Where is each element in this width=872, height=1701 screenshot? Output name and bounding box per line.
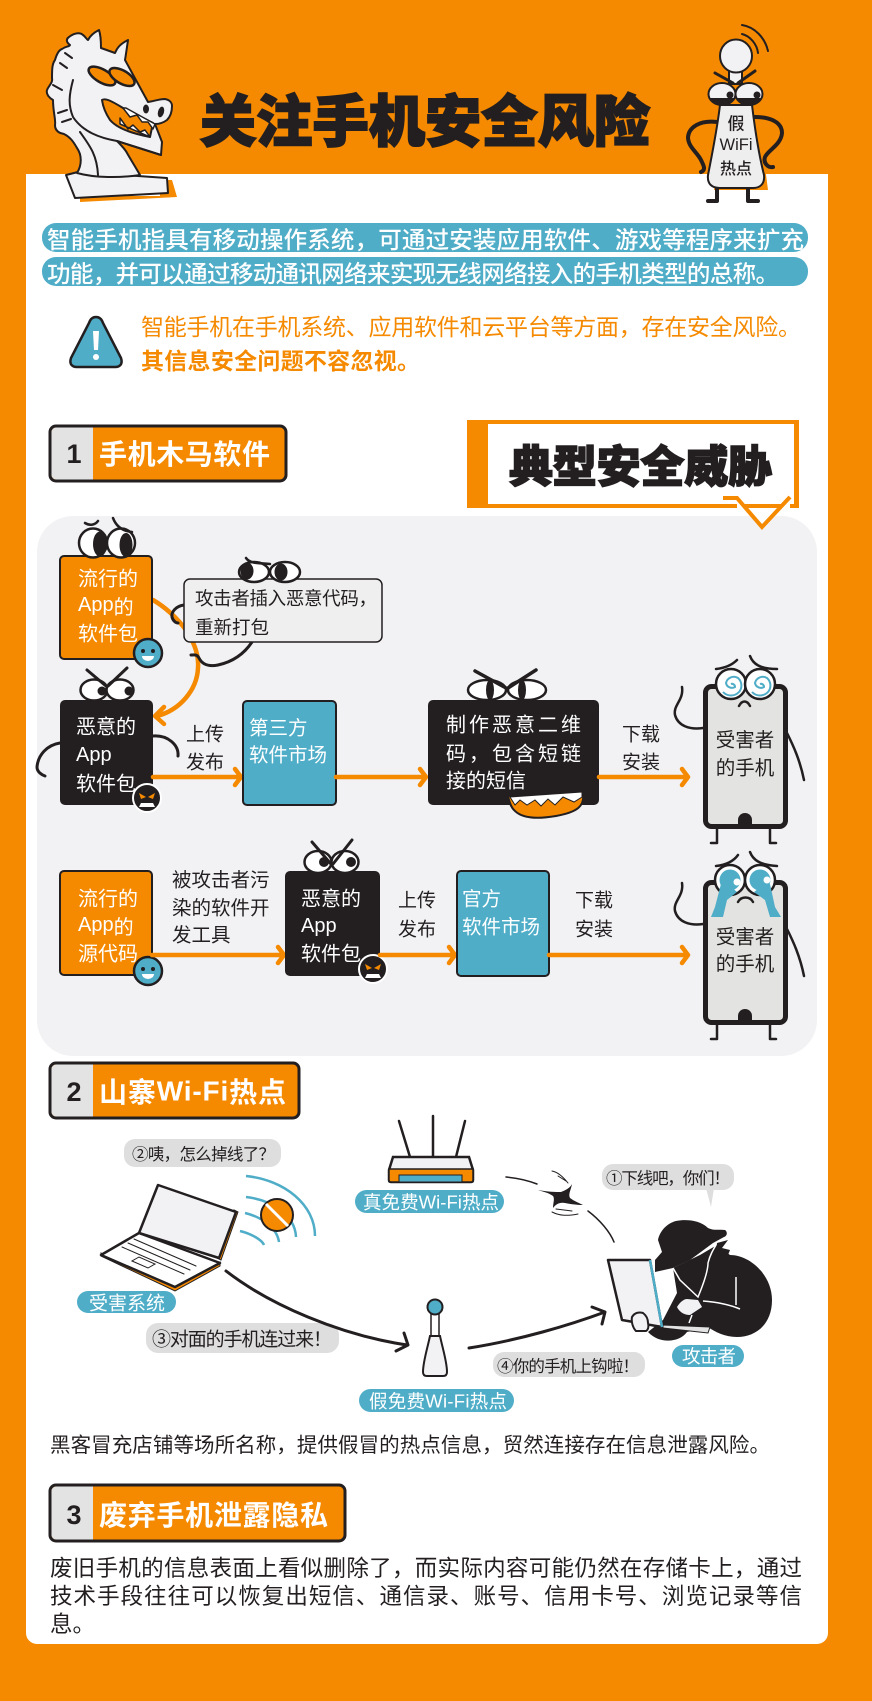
node: popular app package: 流行的	[78, 562, 138, 592]
arrow: to malicious QR	[336, 769, 426, 785]
intro highlighted text: 功能，并可以通过移动通讯网络来实现无线网络接入的手机类型的总称。	[47, 255, 779, 289]
node: malicious QR SMS: 接的短信	[446, 764, 526, 794]
node: malicious app package	[37, 668, 178, 812]
node: third party market	[243, 701, 336, 805]
bubble: attacker speech: ①下线吧，你们！	[606, 1165, 730, 1189]
arrow: to third party market	[153, 769, 241, 785]
node: malicious app package 2: App	[301, 915, 337, 937]
icon: broken connection	[506, 1171, 614, 1242]
section badge 2: 2	[66, 1077, 82, 1107]
label: upload publish: 上传	[186, 720, 224, 746]
arrow: to official market	[380, 947, 455, 963]
warning text: 智能手机在手机系统、应用软件和云平台等方面，存在安全风险。	[141, 308, 801, 342]
gray flow panel	[37, 516, 817, 1056]
phone: dizzy victim: 受害者	[716, 724, 774, 752]
icon: fake WiFi hotspot character: WiFi	[720, 136, 752, 154]
icon: victim laptop with wifi waves	[101, 1176, 315, 1291]
heading callout: typical security threats	[467, 420, 799, 527]
node: popular app source code: 源代码	[78, 938, 138, 966]
arrow: fake hotspot to attacker	[469, 1307, 605, 1348]
intro highlighted text	[42, 221, 808, 289]
label: upload publish 2: 发布	[398, 914, 436, 942]
speech box: attacker repackages: 攻击者插入恶意代码，	[195, 585, 377, 611]
node: official market	[457, 871, 549, 976]
icon: hacker at laptop	[608, 1220, 772, 1341]
node: malicious app package: 恶意的	[76, 710, 136, 740]
speech box: attacker repackages	[172, 558, 382, 666]
section badge 1	[50, 426, 286, 481]
icon: dragon chess knight	[47, 30, 177, 202]
title: 关注手机安全风险	[200, 78, 650, 158]
node: malicious QR SMS: 码，包含短链	[446, 738, 581, 766]
text: discarded phone explanation: 技术手段往往可以恢复出短信、通信录、账号、信用卡号、浏览记录等信	[50, 1579, 802, 1611]
label: infected dev tools: 发工具	[172, 918, 231, 948]
section badge 3: 废弃手机泄露隐私	[99, 1494, 328, 1534]
bubble: attacker speech	[602, 1164, 734, 1207]
arrow: curved repack arrow	[153, 600, 198, 724]
label: upload publish 2	[398, 886, 436, 942]
node: malicious app package 2: 恶意的	[301, 882, 361, 912]
node: malicious app package 2: 软件包	[301, 938, 361, 966]
arrow: victim to fake hotspot	[226, 1271, 408, 1351]
icon: fake WiFi hotspot character	[688, 25, 782, 201]
node: third party market: 软件市场	[249, 738, 327, 768]
label: attacker: 攻击者	[682, 1343, 736, 1369]
icon: evil face	[359, 955, 387, 983]
icon: fake WiFi hotspot character: 热点	[720, 155, 752, 179]
label: download install 2	[575, 886, 613, 942]
node: popular app package	[60, 518, 162, 667]
label: victim system: 受害系统	[89, 1288, 165, 1316]
label: infected dev tools	[172, 864, 270, 948]
icon: smiling face	[134, 957, 162, 985]
node: popular app source code	[60, 871, 162, 985]
node: malicious QR SMS	[428, 670, 599, 818]
arrow: to victim phone	[599, 769, 688, 785]
icon: evil face	[133, 784, 161, 812]
text: fake hotspot explanation: 黑客冒充店铺等场所名称，提供假冒的热点信息，贸然连接存在信息泄露风险。	[50, 1428, 770, 1458]
label: infected dev tools: 染的软件开	[172, 892, 270, 920]
label: real free wifi: 真免费Wi-Fi热点	[363, 1189, 499, 1215]
text: discarded phone explanation: 废旧手机的信息表面上看似删除了，而实际内容可能仍然在存储卡上，通过	[50, 1551, 802, 1583]
node: popular app source code: App的	[78, 910, 134, 940]
section badge 2	[50, 1063, 299, 1118]
text: discarded phone explanation	[50, 1551, 802, 1639]
section badge 2: 山寨Wi-Fi热点	[99, 1071, 286, 1111]
node: official market: 官方	[462, 882, 501, 912]
bubble: phone hooked: ④你的手机上钩啦！	[497, 1353, 639, 1377]
node: official market: 软件市场	[462, 910, 540, 940]
node: malicious QR SMS: 制作恶意二维	[446, 708, 581, 738]
bubble: phone connecting: ③对面的手机连过来！	[152, 1324, 332, 1352]
label: upload publish 2: 上传	[398, 886, 436, 912]
phone: dizzy victim	[675, 656, 804, 843]
section badge 3: 3	[66, 1500, 82, 1530]
label: infected dev tools: 被攻击者污	[172, 864, 270, 892]
bubble: why disconnected: ②咦，怎么掉线了？	[132, 1141, 275, 1165]
label: upload publish	[186, 720, 224, 774]
node: popular app package: App的	[78, 590, 134, 620]
label: upload publish: 发布	[186, 748, 224, 774]
arrow: to malicious package	[152, 947, 284, 963]
section badge 1: 1	[66, 439, 82, 469]
icon: fake WiFi hotspot character: 假	[728, 110, 744, 134]
speech box: attacker repackages: 重新打包	[195, 614, 269, 640]
arrow: to victim phone 2	[549, 947, 688, 963]
label: download install: 安装	[622, 748, 660, 774]
panel: white content sheet	[26, 174, 828, 1644]
label: download install: 下载	[622, 720, 660, 746]
phone: crying victim: 受害者	[716, 920, 774, 950]
icon: warning triangle	[70, 317, 122, 367]
node: popular app package: 软件包	[78, 618, 138, 646]
text: discarded phone explanation: 息。	[50, 1607, 95, 1639]
label: download install 2: 安装	[575, 914, 613, 942]
node: malicious app package: App	[76, 744, 112, 766]
label: download install	[622, 720, 660, 774]
icon: real router	[389, 1116, 473, 1182]
phone: crying victim: 的手机	[716, 948, 775, 976]
icon: monster mouth	[508, 792, 583, 818]
phone: crying victim	[675, 852, 804, 1039]
node: malicious app package 2	[285, 840, 387, 983]
icon: smiling face	[134, 639, 162, 667]
section badge 3	[50, 1485, 345, 1541]
warning text: 其信息安全问题不容忽视。	[141, 342, 420, 376]
section badge 1: 手机木马软件	[99, 433, 270, 473]
heading callout: typical security threats: 典型安全威胁	[509, 431, 772, 495]
node: third party market: 第三方	[249, 712, 308, 740]
phone: dizzy victim: 的手机	[716, 752, 775, 780]
icon: fake hotspot	[423, 1300, 447, 1376]
node: malicious app package: 软件包	[76, 768, 136, 796]
intro highlighted text: 智能手机指具有移动操作系统，可通过安装应用软件、游戏等程序来扩充	[47, 221, 804, 255]
node: popular app source code: 流行的	[78, 882, 138, 912]
label: download install 2: 下载	[575, 886, 613, 912]
warning text	[141, 308, 801, 376]
label: fake free wifi: 假免费Wi-Fi热点	[369, 1388, 507, 1414]
